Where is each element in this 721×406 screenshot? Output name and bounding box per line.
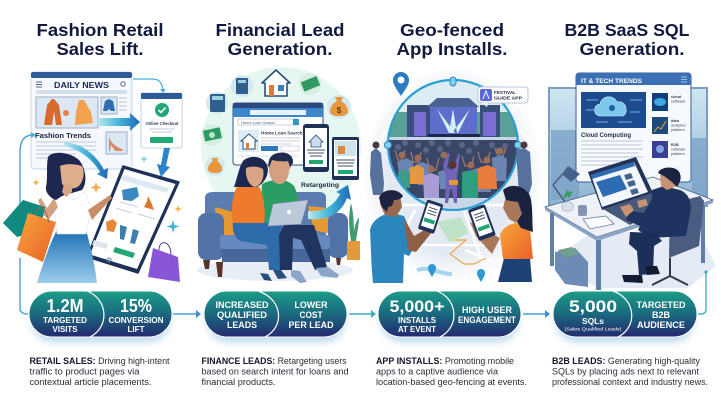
title: b2b saas sql generation — [564, 20, 690, 59]
description: app installs: apps to a captive audience via — [376, 366, 499, 376]
results pill: financial leads — [204, 291, 347, 337]
desk with floor shadow and storage box — [545, 177, 716, 290]
it and tech trends article window: cloud — [671, 95, 682, 99]
panel: financial lead generation — [197, 20, 361, 283]
results pill: b2b sqls: 5,000 — [569, 297, 617, 316]
online checkout card — [141, 93, 182, 148]
title: b2b saas sql generation: B2B SaaS SQL — [564, 20, 690, 40]
festival guide app callout — [478, 87, 528, 107]
title: fashion retail — [36, 20, 164, 59]
tablet with product grid — [87, 166, 179, 273]
woman with shopping bags — [37, 153, 112, 283]
title: fashion retail: Fashion Retail — [36, 20, 164, 40]
connector lines between result pills — [20, 258, 550, 318]
city map background — [363, 67, 543, 283]
results pill: fashion retail — [29, 291, 172, 337]
title: financial lead generation — [216, 20, 344, 59]
title: geo-fenced app installs: App Installs. — [396, 39, 508, 59]
retargeting arrow — [308, 185, 351, 219]
desk lamp, plant and mug — [553, 166, 614, 229]
it and tech trends article window: data — [671, 119, 680, 123]
results pill: financial leads: COST — [300, 310, 323, 320]
map pins — [428, 264, 485, 282]
results pill: financial leads: INCREASED — [216, 300, 268, 310]
description: b2b leads — [552, 355, 708, 387]
search browser window: Home Loan Search — [241, 120, 275, 125]
results pill: fashion retail: VISITS — [52, 325, 78, 334]
results pill: b2b sqls: AUDIENCE — [637, 320, 685, 330]
soft shadows under pills — [32, 300, 694, 342]
it and tech trends article window: software — [671, 100, 685, 104]
couple on sofa with laptop — [197, 152, 353, 283]
title: b2b saas sql generation: Generation. — [580, 39, 684, 59]
description: app installs: location-based geo-fencing at events. — [376, 376, 527, 387]
description: retail sales: contextual article placements. — [30, 376, 152, 387]
results pill: app installs: 5,000+ — [390, 297, 445, 316]
results pill: fashion retail: 15% — [120, 296, 152, 316]
results pill: app installs: AT EVENT — [398, 325, 436, 334]
festival guide app callout: GUIDE APP — [494, 96, 522, 100]
title: financial lead generation: Generation. — [228, 39, 332, 59]
search browser window — [233, 103, 323, 165]
laptop — [588, 157, 663, 225]
finance icons ring — [201, 70, 351, 176]
festival guide app callout: FESTIVAL — [494, 90, 516, 95]
description: retail sales: traffic to product pages via — [30, 366, 140, 376]
it and tech trends article window: IT & TECH TRENDS — [581, 78, 642, 85]
results pill: fashion retail: 1.2M — [46, 296, 84, 316]
connector arrows: browser and checkout to tablet — [20, 79, 170, 205]
description: app installs — [376, 355, 527, 387]
location pin — [393, 72, 409, 96]
retargeting label: Retargeting — [301, 182, 339, 189]
description: app installs: APP INSTALLS: Promoting mobile — [376, 355, 514, 366]
results pill: app installs: ENGAGEMENT — [458, 315, 517, 325]
description: finance leads: based on search intent for loans and — [202, 366, 348, 376]
results pill: app installs — [378, 291, 521, 337]
up arrow to pill — [698, 270, 708, 314]
description: b2b leads: SQLs by placing ads next to relevant — [552, 366, 699, 376]
sparkles — [32, 155, 182, 233]
retargeting tablet ad — [332, 137, 359, 180]
it and tech trends article window: software — [671, 148, 685, 152]
it and tech trends article window: B2B — [671, 143, 679, 147]
panel: b2b saas sql generation — [545, 20, 716, 314]
results pill: fashion retail: CONVERSION — [108, 316, 164, 325]
it and tech trends article window: Cloud Computing — [581, 132, 631, 139]
results pill: b2b sqls: B2B — [652, 310, 670, 320]
geo-fence circle with festival stage and crowd — [384, 77, 524, 210]
it and tech trends article window: analytics — [671, 124, 686, 128]
description: finance leads: financial products. — [202, 376, 276, 387]
description: b2b leads: B2B LEADS: Generating high-quality — [552, 355, 700, 366]
description: retail sales — [30, 355, 170, 387]
it and tech trends article window: platform — [671, 128, 685, 132]
description: b2b leads: professional context and industry news. — [552, 376, 708, 387]
it and tech trends article window — [576, 73, 691, 182]
woman using phone — [468, 186, 533, 282]
title: financial lead generation: Financial Lead — [216, 20, 344, 40]
title: geo-fenced app installs: Geo-fenced — [400, 20, 504, 40]
title: fashion retail: Sales Lift. — [56, 39, 144, 59]
man using phone — [370, 190, 444, 283]
results pill: b2b sqls: SQLs — [582, 317, 605, 326]
results pill: fashion retail: TARGETED — [43, 316, 87, 325]
mint background circle — [201, 67, 361, 227]
results pill: financial leads: QUALIFIED — [217, 310, 267, 320]
results pill: b2b sqls: TARGETED — [636, 300, 686, 310]
online checkout card: Online Checkout — [146, 121, 179, 127]
results pill: app installs: INSTALLS — [398, 316, 436, 325]
title: geo-fenced app installs — [396, 20, 508, 59]
potted plant — [347, 203, 360, 260]
arrow: article to checkout — [98, 113, 140, 131]
search browser window: Home Loan Search — [261, 130, 303, 136]
results pill: b2b sqls: (Sales Qualified Leads) — [564, 326, 622, 332]
office window with skyline — [549, 88, 707, 206]
news article browser window: Fashion Trends — [35, 131, 91, 140]
results pill: app installs: HIGH USER — [462, 305, 513, 315]
description: retail sales: RETAIL SALES: Driving high-intent — [30, 355, 170, 366]
panel: geo-fenced app installs — [363, 20, 543, 283]
news article browser window: DAILY NEWS — [54, 80, 109, 90]
description: finance leads — [202, 355, 348, 387]
news article browser window — [31, 72, 132, 169]
results pill: b2b sqls — [553, 291, 697, 337]
man working at desk — [620, 168, 704, 285]
results pill: financial leads: LOWER — [294, 300, 328, 310]
finance icons ring: $ — [337, 106, 342, 115]
crowd outside fence — [370, 142, 532, 195]
results pill: fashion retail: LIFT — [128, 325, 145, 334]
panel: fashion retail — [3, 20, 182, 283]
results pill: financial leads: PER LEAD — [288, 320, 334, 330]
shopping bags — [3, 200, 180, 282]
results pill: financial leads: LEADS — [227, 320, 257, 330]
retargeting phone ad — [303, 124, 329, 172]
description: finance leads: FINANCE LEADS: Retargeting users — [202, 355, 347, 366]
it and tech trends article window: platform — [671, 152, 685, 156]
